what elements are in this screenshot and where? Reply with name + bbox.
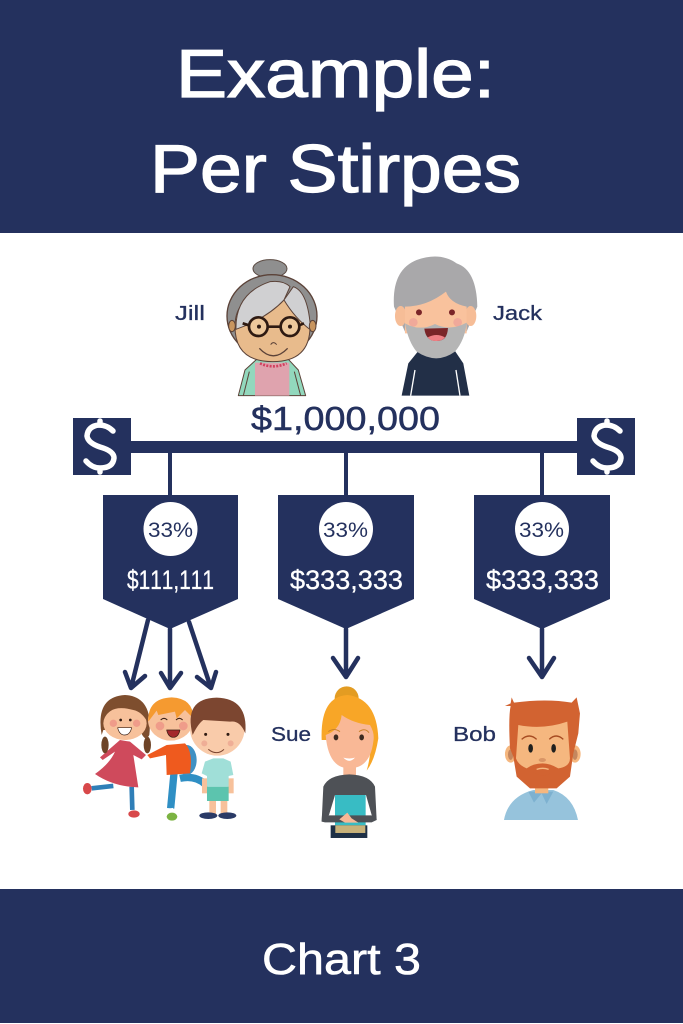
label: Sue: Sue xyxy=(271,724,311,746)
icon: Bob xyxy=(504,697,581,820)
share panel: Bob: $333,333 xyxy=(486,565,599,595)
icon: three grandchildren xyxy=(83,695,246,821)
arrow to Sue xyxy=(333,629,358,677)
label: Jack: Jack xyxy=(493,303,543,325)
share panel: grandchildren xyxy=(103,495,238,629)
icon: right dollar box xyxy=(577,418,635,475)
label: Jill: Jill xyxy=(175,303,205,325)
title line 1: Example: xyxy=(176,36,495,112)
share panel: grandchildren: 33% xyxy=(148,519,193,542)
boy in teal shirt xyxy=(190,698,246,819)
icon: Sue xyxy=(322,686,378,838)
arrow to Bob xyxy=(529,629,554,677)
label: Bob: Bob xyxy=(453,724,496,746)
footer band xyxy=(0,889,683,1023)
estate amount: $1,000,000 xyxy=(251,400,440,437)
share panel: Bob xyxy=(474,495,610,629)
share panel: Bob: 33% xyxy=(519,519,564,542)
share panel: Sue: 33% xyxy=(323,519,368,542)
distribution bar with branches xyxy=(130,441,578,496)
share panel: Sue: $333,333 xyxy=(290,565,403,595)
icon: Jill grandmother xyxy=(227,260,317,396)
header band xyxy=(0,0,683,233)
icon: Jack grandfather xyxy=(394,257,477,396)
girl xyxy=(83,695,151,818)
icon: left dollar box xyxy=(73,418,131,475)
share panel: grandchildren: $111,111 xyxy=(127,565,214,595)
share panel: Sue xyxy=(278,495,414,629)
arrows to grandchildren xyxy=(125,620,216,688)
boy with backpack xyxy=(147,697,205,821)
chart label: Chart 3 xyxy=(262,935,421,984)
title line 2: Per Stirpes xyxy=(150,131,521,207)
